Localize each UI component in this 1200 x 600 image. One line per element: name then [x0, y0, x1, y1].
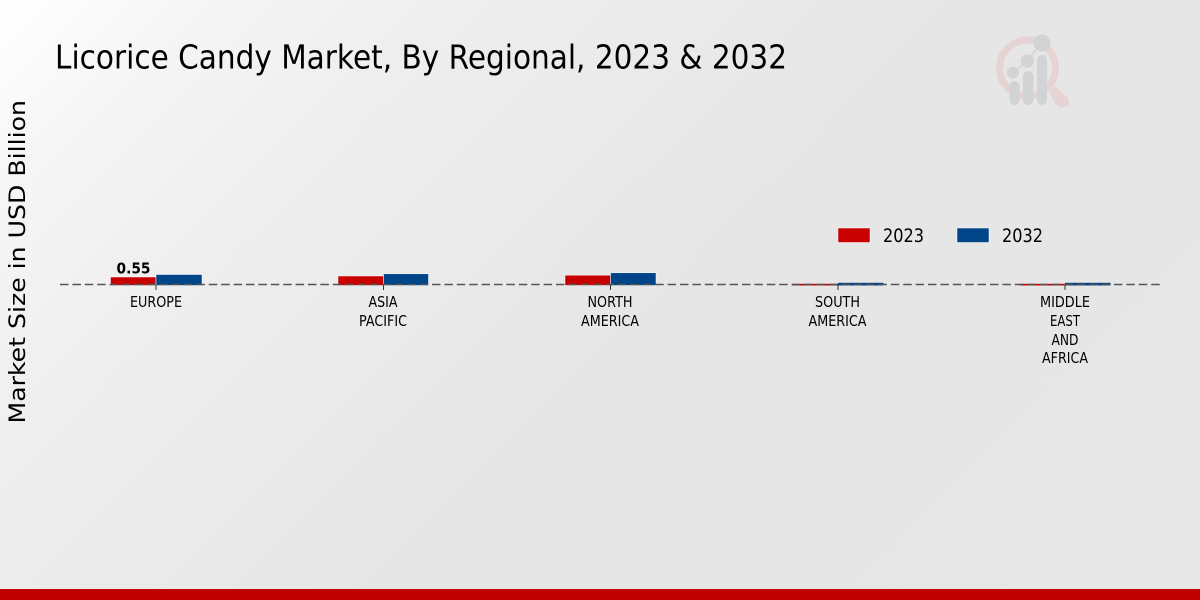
x label: Middle East and Africa: AND [1052, 331, 1078, 349]
x label: Europe: EUROPE [130, 293, 182, 311]
y axis label: Market Size in USD Billion [5, 100, 31, 424]
legend: 2023 [883, 225, 924, 247]
icon: watermark logo [1000, 34, 1069, 108]
x label: South America: AMERICA [808, 312, 867, 330]
bar chart [60, 260, 1160, 290]
bars: Europe [110, 274, 202, 286]
x label: North America [581, 293, 640, 330]
x label: Middle East and Africa: AFRICA [1042, 349, 1089, 367]
x label: North America: AMERICA [581, 312, 640, 330]
bars: Middle East and Africa [1020, 283, 1110, 286]
x label: North America: NORTH [588, 293, 632, 311]
x label: Middle East and Africa: EAST [1050, 312, 1081, 330]
footer bar [0, 589, 1200, 600]
x label: Asia Pacific: ASIA [368, 293, 398, 311]
x label: Asia Pacific: PACIFIC [359, 312, 407, 330]
bars: South America [792, 283, 884, 286]
x label: South America: SOUTH [815, 293, 860, 311]
bars: Asia Pacific [338, 274, 428, 286]
legend: 2032 [1002, 225, 1043, 247]
legend [838, 225, 1043, 247]
bars: North America [565, 273, 656, 286]
x label: Asia Pacific [359, 293, 407, 330]
x label: South America [808, 293, 867, 330]
x label: Middle East and Africa [1040, 293, 1090, 367]
title: Licorice Candy Market, By Regional, 2023 & 2032 [55, 38, 787, 76]
x label: Middle East and Africa: MIDDLE [1040, 293, 1090, 311]
data label: 0.55: 0.55 [116, 260, 150, 278]
